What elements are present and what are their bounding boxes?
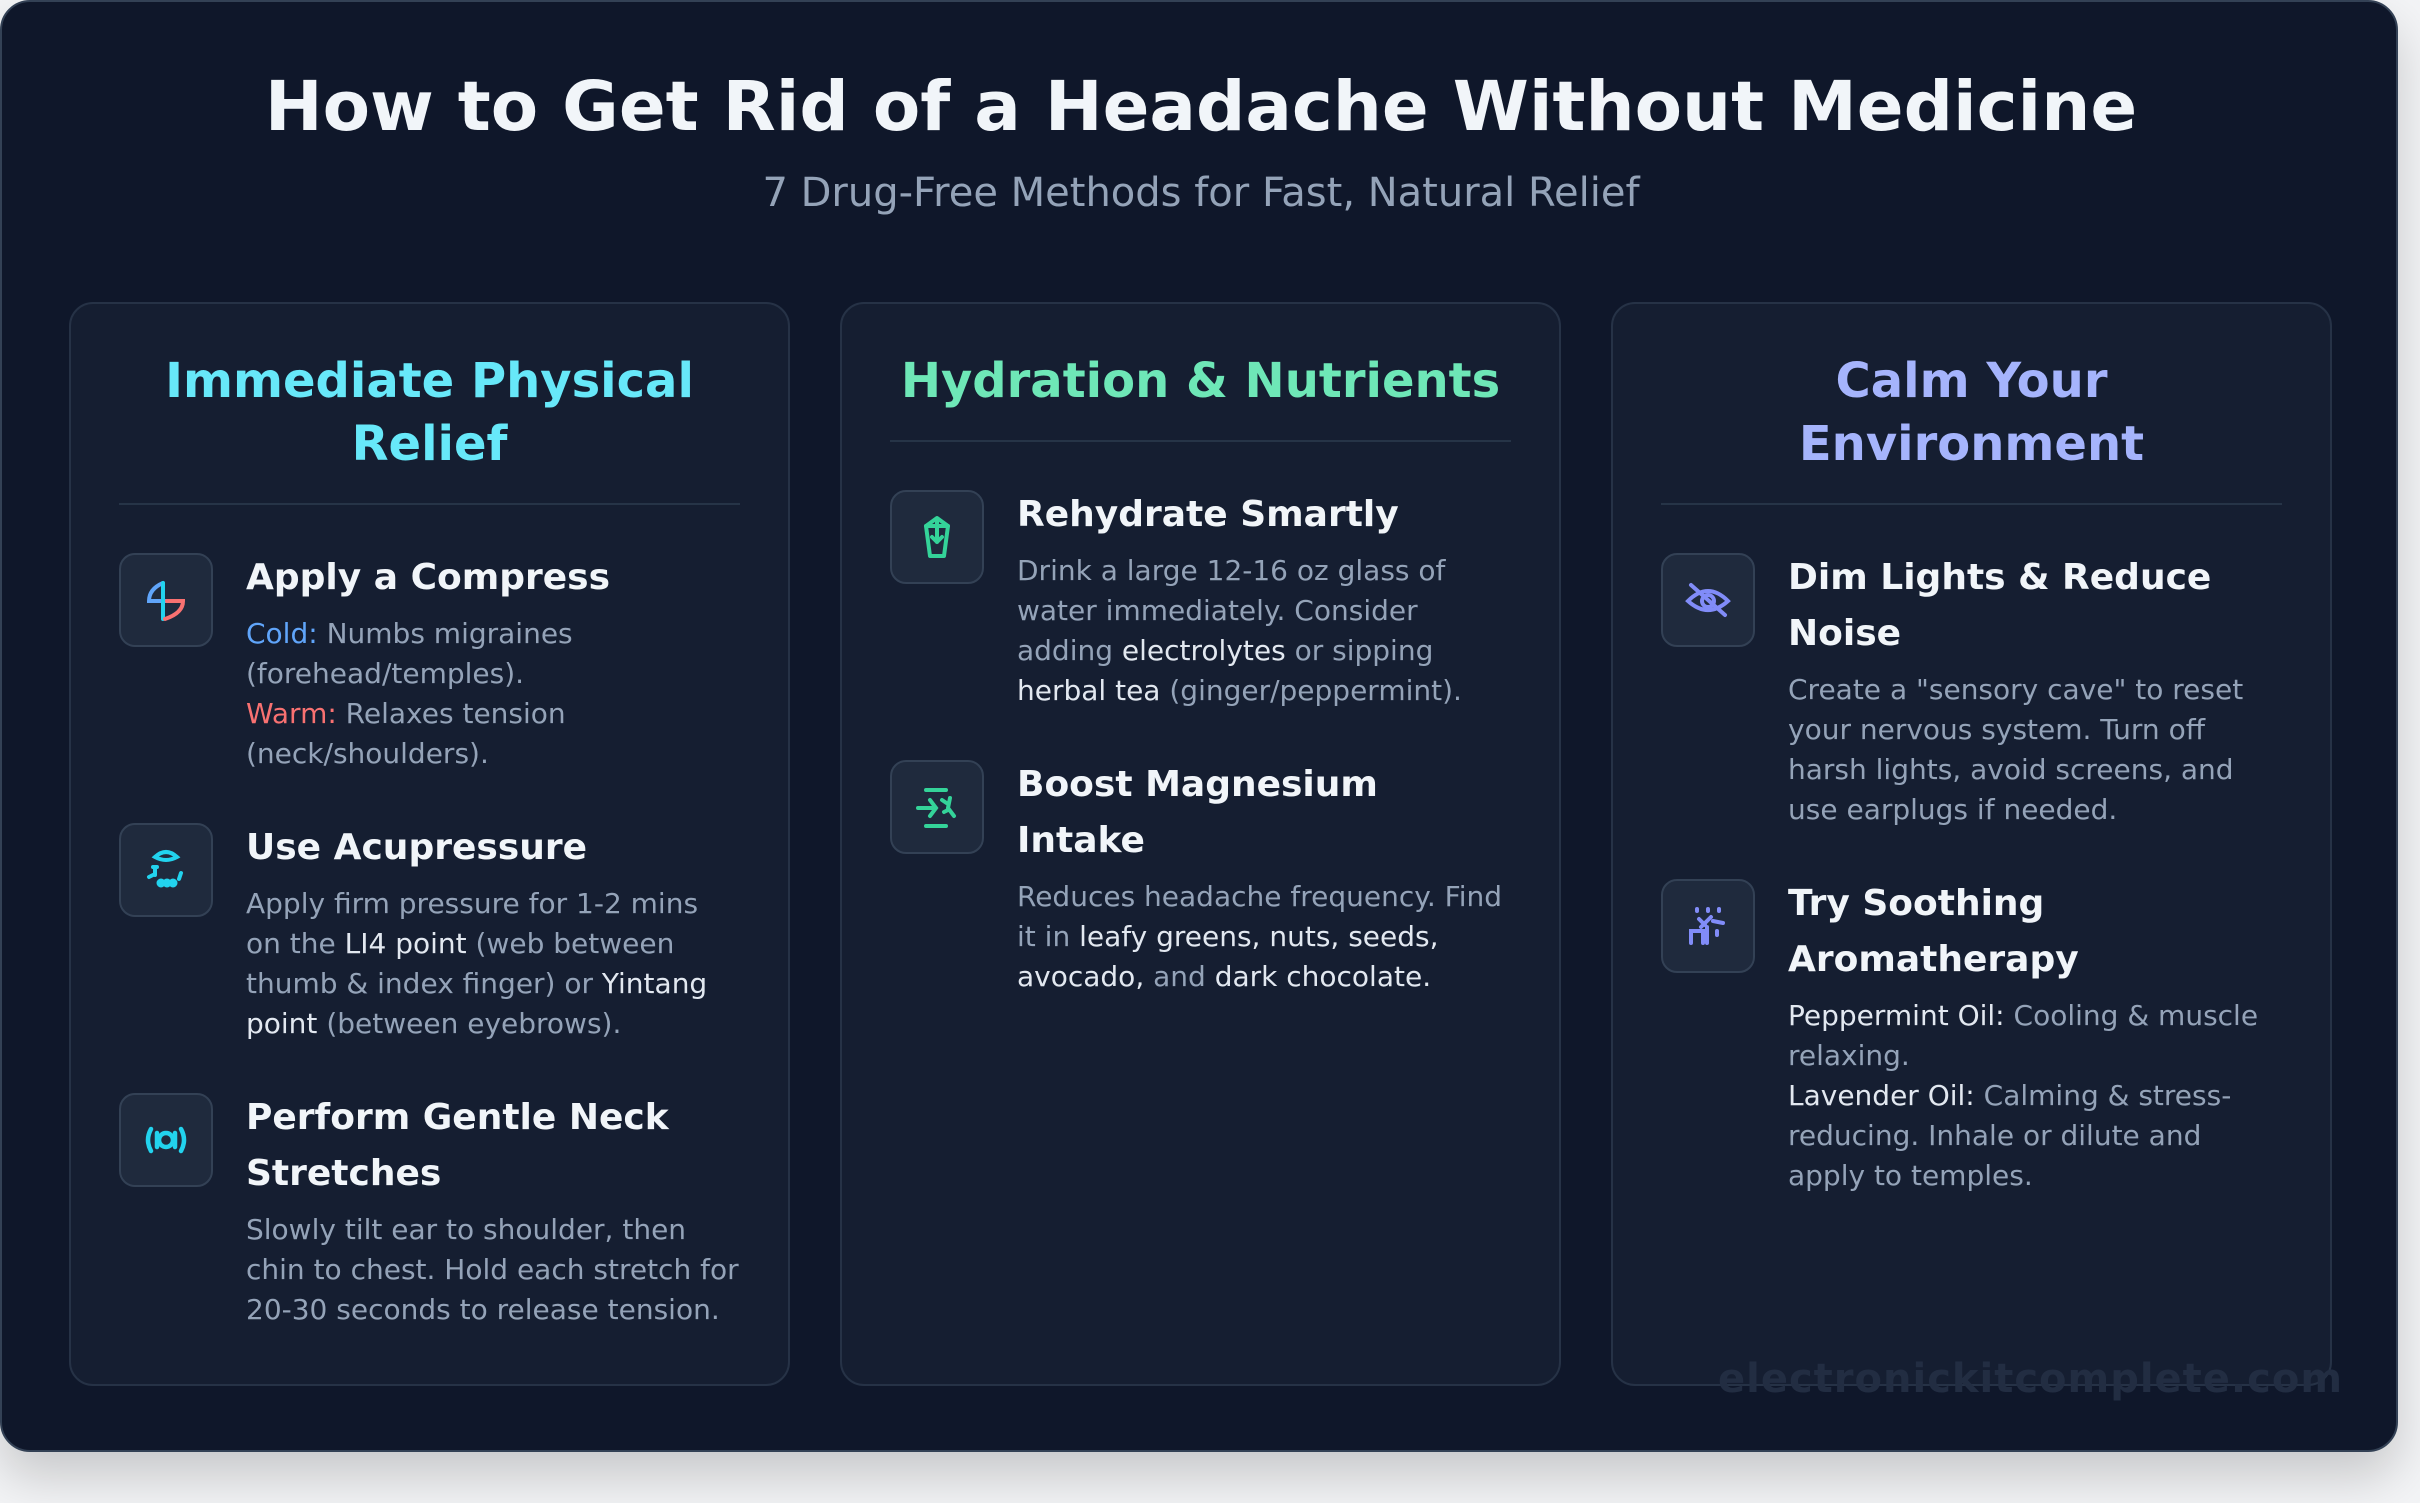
item: neck stretches xyxy=(119,1093,739,1326)
item: magnesium: Boost Magnesium Intake xyxy=(1017,764,1378,861)
item: aromatherapy: Lavender Oil: Calming & stress-reducing. Inhale or dilute and apply to temples. xyxy=(1788,1079,2231,1192)
panel: calm your environment xyxy=(1611,302,2332,1386)
item: use acupressure: Use Acupressure xyxy=(246,827,587,868)
item: apply a compress xyxy=(119,553,610,770)
item: rehydrate xyxy=(890,490,1462,707)
item: neck stretches: Slowly tilt ear to shoulder, then chin to chest. Hold each stretch for 20-30 seconds to release tension. xyxy=(246,1213,739,1326)
heading: calm environment: Environment xyxy=(1799,416,2144,472)
heading: immediate physical relief xyxy=(165,353,694,472)
item: dim lights: Dim Lights & Reduce Noise xyxy=(1788,557,2211,654)
icon: magnesium xyxy=(890,760,984,854)
item: apply a compress: Apply a Compress xyxy=(246,557,610,598)
icon: eye off xyxy=(1661,553,1755,647)
icon: stretch xyxy=(119,1093,213,1187)
icon: compress xyxy=(119,553,213,647)
panel: hydration & nutrients xyxy=(840,302,1561,1386)
heading: immediate physical relief: Immediate Physical xyxy=(165,353,694,409)
heading: calm environment xyxy=(1799,353,2144,472)
item: aromatherapy xyxy=(1661,879,2258,1192)
heading: immediate physical relief: Relief xyxy=(352,416,507,472)
heading: hydration: Hydration & Nutrients xyxy=(901,353,1500,409)
watermark: electronickitcomplete.com xyxy=(1718,1356,2343,1402)
item: apply a compress: Cold: Numbs migraines (forehead/temples). xyxy=(246,617,573,690)
icon: aroma xyxy=(1661,879,1755,973)
item: magnesium: Reduces headache frequency. Find it in leafy greens, nuts, seeds, avocado, and dark chocolate. xyxy=(1017,880,1502,993)
heading: calm environment: Calm Your xyxy=(1836,353,2107,409)
item: aromatherapy: Try Soothing Aromatherapy xyxy=(1788,883,2079,980)
item: use acupressure xyxy=(119,823,707,1040)
item: use acupressure: Apply firm pressure for 1-2 mins on the LI4 point (web between thumb & index finger) or Yintang point (between eyebrows). xyxy=(246,887,707,1040)
item: neck stretches: Perform Gentle Neck Stretches xyxy=(246,1097,669,1194)
item: apply a compress: Warm: Relaxes tension (neck/shoulders). xyxy=(246,697,566,770)
item: dim lights xyxy=(1661,553,2243,826)
item: dim lights: Create a "sensory cave" to reset your nervous system. Turn off harsh lights, avoid screens, and use earplugs if needed. xyxy=(1788,673,2243,826)
panel: immediate physical relief xyxy=(69,302,790,1386)
icon: glass xyxy=(890,490,984,584)
title: How to Get Rid of a Headache Without Medicine xyxy=(265,67,2137,147)
item: aromatherapy: Peppermint Oil: Cooling & muscle relaxing. xyxy=(1788,999,2258,1072)
item: rehydrate: Rehydrate Smartly xyxy=(1017,494,1399,535)
item: rehydrate: Drink a large 12-16 oz glass of water immediately. Consider adding electrolytes or sipping herbal tea (ginger/peppermint). xyxy=(1017,554,1462,707)
icon: acupressure xyxy=(119,823,213,917)
item: magnesium xyxy=(890,760,1502,993)
subtitle: 7 Drug-Free Methods for Fast, Natural Relief xyxy=(762,170,1640,216)
